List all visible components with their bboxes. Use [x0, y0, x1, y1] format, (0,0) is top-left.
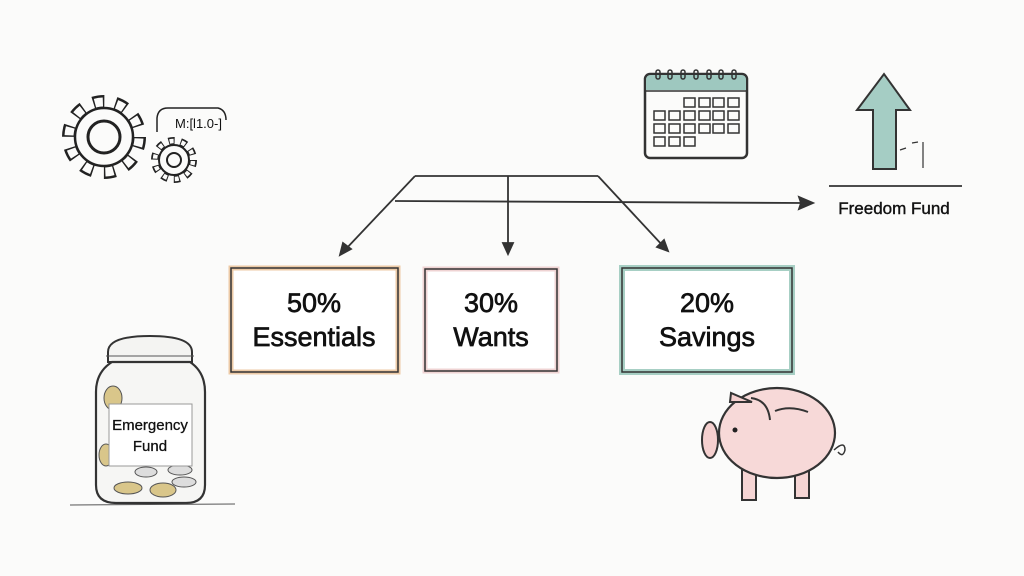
- box: 50% Essentials: Essentials: [252, 322, 376, 352]
- box: 20% Savings: Savings: [659, 322, 755, 352]
- note: M:11.0 label: M:[l1.0-]: [175, 116, 222, 131]
- box: 50% Essentials: 50%: [287, 288, 341, 318]
- box: 50% Essentials: [231, 268, 398, 372]
- icon: large gear: [69, 102, 139, 172]
- icon: up arrow: [857, 74, 923, 169]
- arrows: split flow: [340, 176, 813, 255]
- box: 30% Wants: [425, 269, 557, 371]
- box: 20% Savings: [622, 268, 792, 372]
- box: 20% Savings: 20%: [680, 288, 734, 318]
- box: 30% Wants: Wants: [453, 322, 529, 352]
- divider line above Freedom Fund: [829, 185, 962, 187]
- icon: emergency fund jar: Emergency: [112, 417, 188, 434]
- icon: calendar: [645, 70, 747, 158]
- icon: emergency fund jar: Fund: [133, 438, 167, 455]
- icon: small gear: [155, 141, 193, 179]
- icon: emergency fund jar: [70, 336, 235, 505]
- icon: piggy bank: [702, 388, 845, 500]
- box: 30% Wants: 30%: [464, 288, 518, 318]
- text: Freedom Fund: Freedom Fund: [838, 199, 950, 218]
- note: M:11.0 label: [157, 108, 226, 132]
